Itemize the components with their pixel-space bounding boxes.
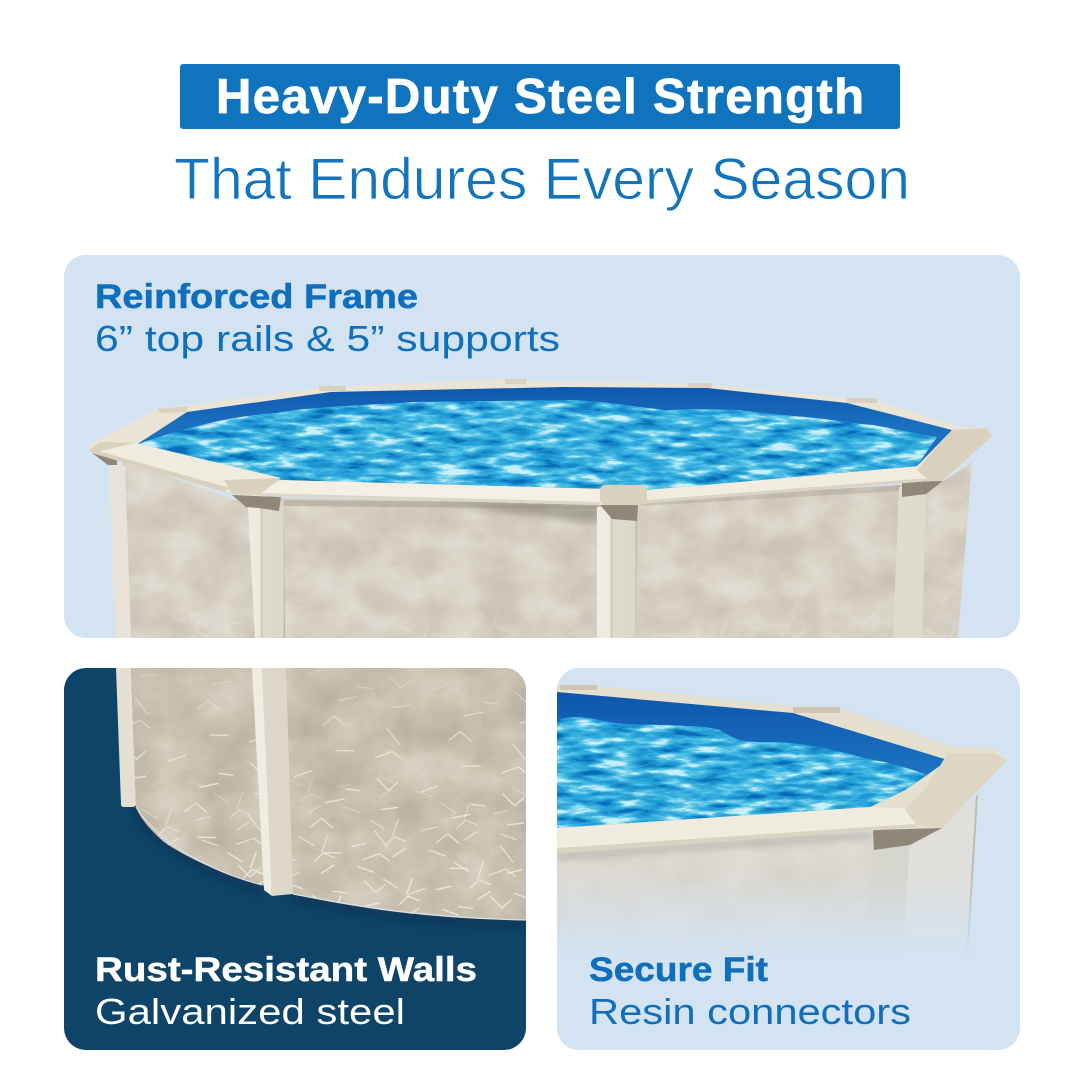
front post [252, 668, 293, 896]
connector undersides [92, 453, 943, 521]
pool walls [120, 460, 975, 638]
corner connector [905, 753, 1007, 828]
wall sections [557, 795, 978, 960]
water [130, 398, 955, 493]
textured wall [125, 668, 526, 928]
panel: rust-resistant walls [64, 668, 526, 1050]
caption: galvanized steel: Galvanized steel [95, 991, 405, 1032]
support post [873, 840, 909, 906]
wall bottom edge [136, 807, 526, 920]
caption: rails and supports: 6” top rails & 5” supports [95, 318, 560, 359]
pool liner [136, 387, 952, 490]
panel: secure fit [557, 668, 1020, 1050]
resin connectors [89, 379, 992, 505]
wall close-up illustration [116, 668, 526, 928]
left post [116, 668, 136, 807]
wall fade [557, 886, 972, 960]
heading: reinforced frame: Reinforced Frame [95, 278, 418, 316]
heading: rust-resistant walls: Rust-Resistant Walls [95, 951, 477, 989]
rail shading [92, 443, 930, 505]
panel: reinforced frame [64, 255, 1020, 638]
pool illustration: full pool [88, 379, 992, 638]
connector underside [873, 828, 942, 850]
title banner: Heavy-Duty Steel Strength [216, 70, 864, 124]
top rail back [557, 685, 1007, 830]
support posts [109, 462, 926, 638]
top rail [88, 379, 992, 505]
caption: resin connectors: Resin connectors [589, 991, 911, 1032]
connector close-up illustration [557, 685, 1007, 965]
water [557, 712, 932, 832]
subtitle: That Endures Every Season [174, 147, 910, 212]
heading: secure fit: Secure Fit [589, 951, 768, 989]
back connectors [560, 685, 840, 713]
front rail [557, 807, 917, 853]
liner [557, 692, 948, 828]
